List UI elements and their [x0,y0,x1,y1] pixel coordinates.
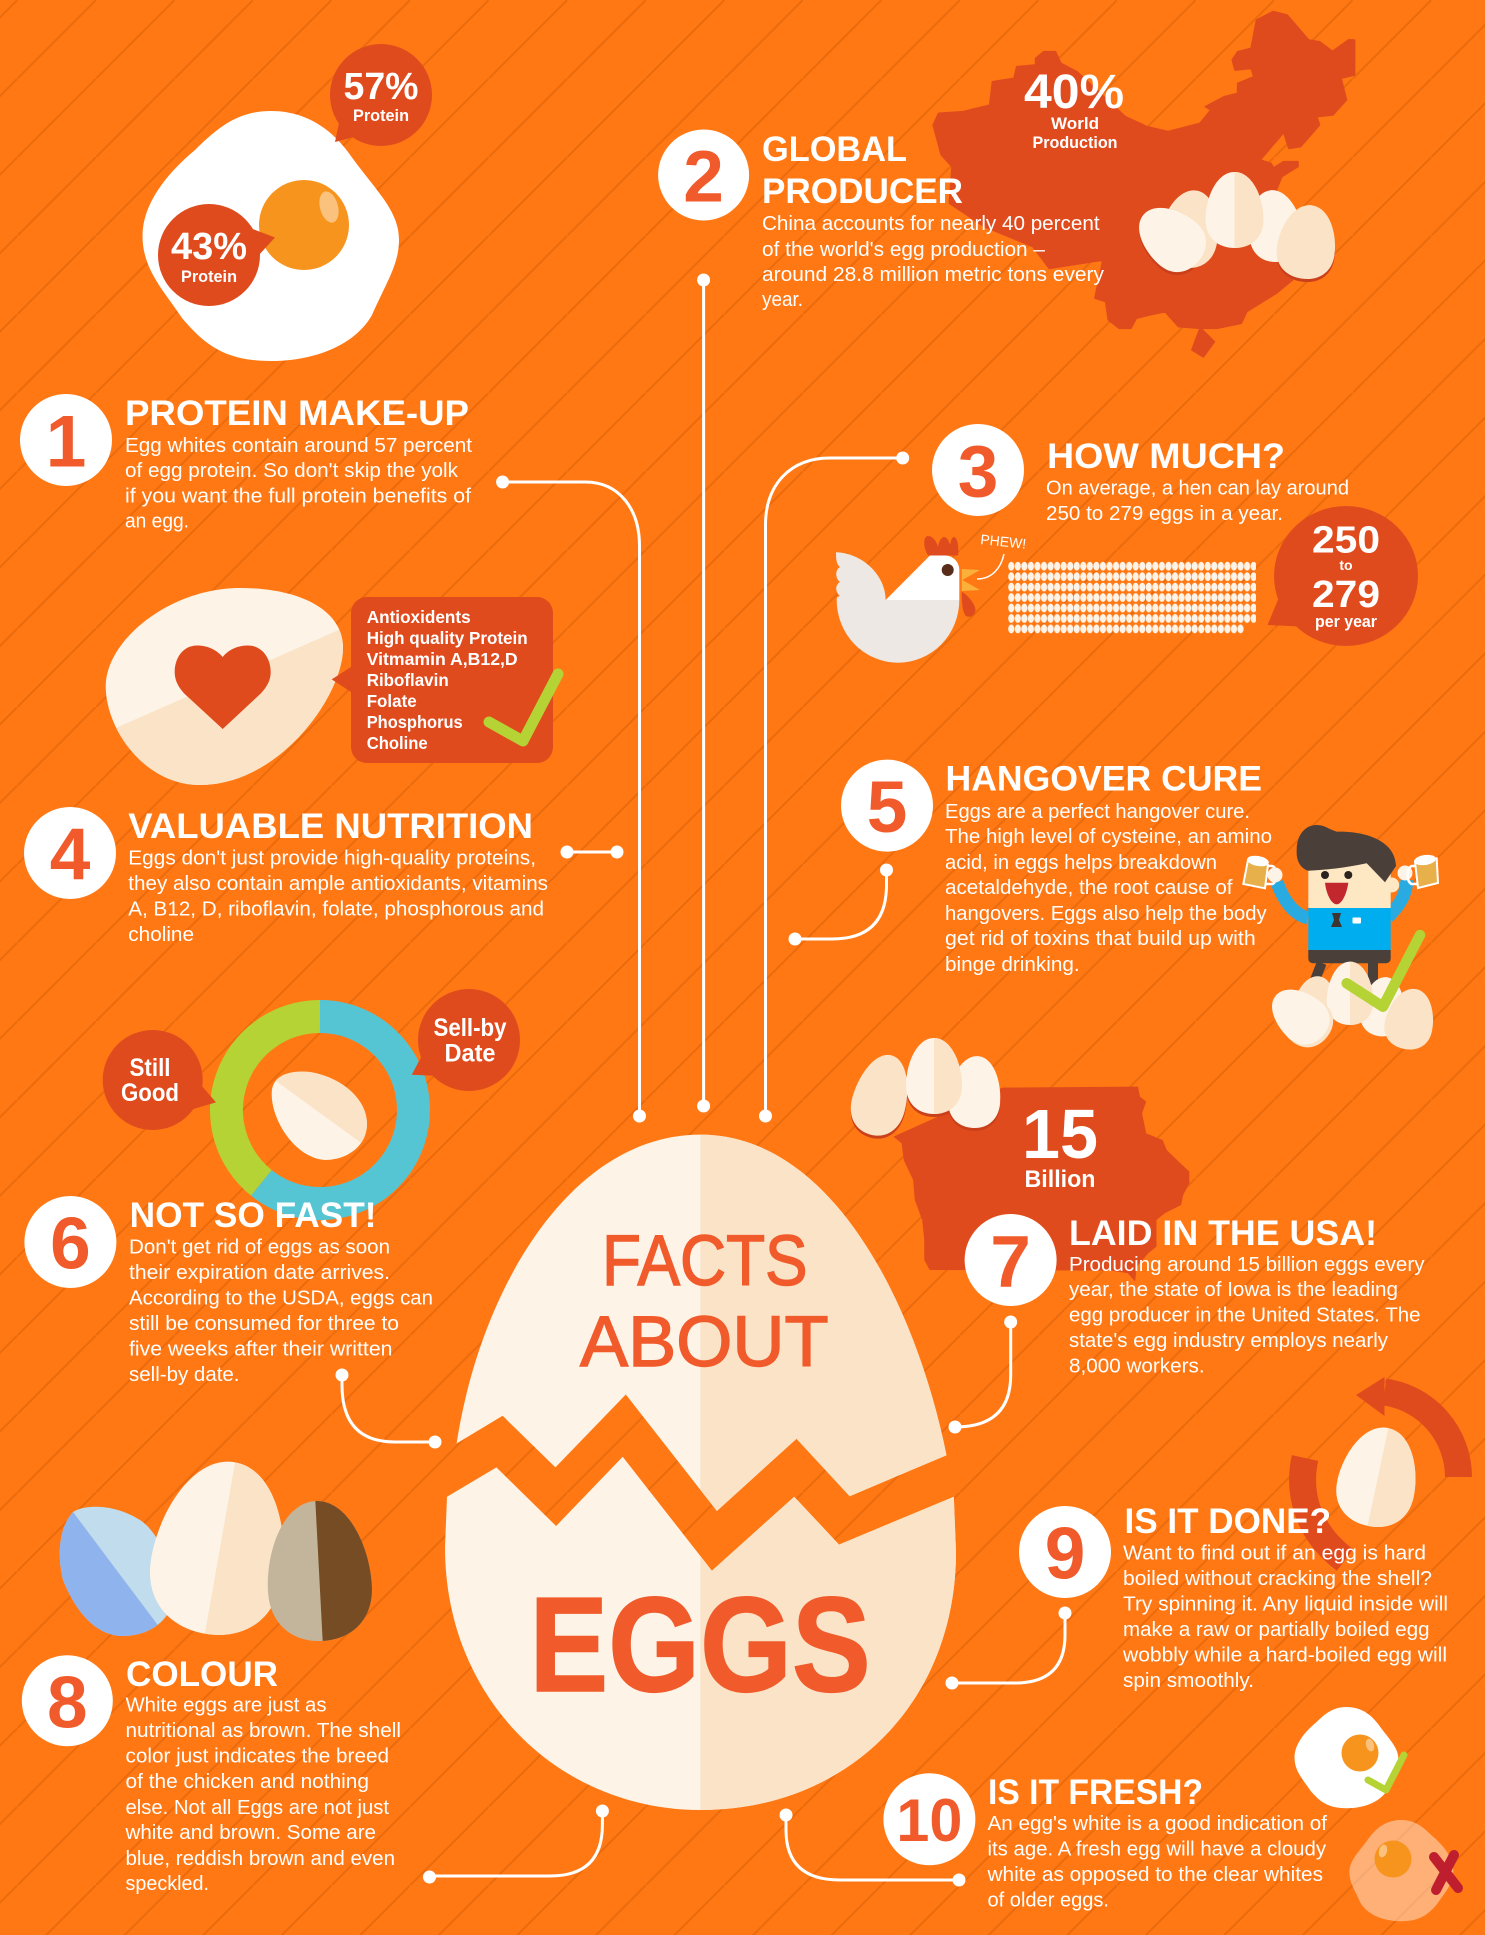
title: facts about: ABOUT [580,1303,829,1382]
section 3: how much: On average, a hen can lay around [1046,477,1349,500]
bubble: sell-by date: Sell-by [434,1014,507,1042]
icon: red cross [1434,1855,1458,1890]
section 2: global producer: China accounts for nearly 40 percent [762,212,1100,235]
section 4: valuable nutrition: 4 [50,815,91,896]
section 7: laid in the USA [965,1214,1425,1378]
section 9: is it done: wobbly while a hard-boiled egg will [1122,1644,1447,1666]
section 2: global producer: PRODUCER [762,172,963,211]
section 4: valuable nutrition: Eggs don't just provide high-quality proteins, [128,847,536,870]
section 8: colour: nutritional as brown. The shell [126,1719,401,1742]
section 1: protein make-up: of egg protein. So don't skip the yolk [125,459,459,482]
title: facts about [580,1222,829,1382]
section 6: not so fast: Don't get rid of eggs as soon [129,1236,390,1258]
section 8: colour: blue, reddish brown and even [126,1847,395,1870]
section 6: not so fast: NOT SO FAST! [130,1196,376,1235]
title egg: cracked shell with heading [445,1135,956,1810]
section 8: colour: White eggs are just as [126,1694,326,1717]
callout: nutrient list: Folate [367,691,417,711]
section 10: is it fresh: its age. A fresh egg will have a cloudy [988,1838,1327,1861]
section 9: is it done: 9 [1045,1514,1085,1595]
callout: nutrient list: Vitmamin A,B12,D [367,649,518,669]
section 10: is it fresh: white as opposed to the clear whites [986,1863,1323,1886]
section 2: global producer [658,130,1105,311]
section 6: not so fast: their expiration date arrives. [129,1261,390,1284]
text: 40% world production: World [1051,114,1099,133]
callout: nutrient list: High quality Protein [367,628,528,648]
section 4: valuable nutrition: they also contain ample antioxidants, vitamins [128,872,548,895]
bubble: still good [103,1030,216,1130]
illustration: fresh fried egg [1295,1707,1404,1808]
section 4: valuable nutrition: A, B12, D, riboflavin, folate, phosphorous and [128,898,544,921]
section 2: global producer: 2 [683,137,724,218]
section 6: not so fast: 6 [50,1204,91,1285]
section 2: global producer: GLOBAL [762,130,907,169]
illustration: coloured eggs [60,1451,375,1645]
section 6: not so fast: still be consumed for three to [129,1312,399,1335]
text: 40% world production [1024,66,1124,152]
connector lines [336,274,1072,1886]
section 5: hangover cure: Eggs are a perfect hangover cure. [945,800,1250,823]
illustration: Iowa map with eggs [844,1038,1189,1282]
section 6: not so fast: sell-by date. [129,1363,240,1386]
icon: check mark [1368,1755,1404,1790]
chart: eggs laid dot grid [1008,561,1256,634]
icon: heart [175,646,271,729]
section 7: laid in the USA: year, the state of Iowa is the leading [1069,1278,1398,1301]
section 5: hangover cure [841,760,1272,976]
section 4: valuable nutrition: VALUABLE NUTRITION [128,807,533,846]
section 8: colour: 8 [47,1662,88,1743]
section 9: is it done: spin smoothly. [1123,1669,1254,1692]
section 6: not so fast: According to the USDA, eggs can [129,1286,433,1310]
bubble: 43% protein [158,204,275,306]
bubble: sell-by date: Date [444,1040,496,1068]
bubble: sell-by date [412,989,520,1091]
illustration: sell-by donut chart [103,989,520,1204]
section 10: is it fresh: An egg's white is a good indication of [988,1812,1327,1835]
section 5: hangover cure: hangovers. Eggs also help the body [945,902,1267,925]
bubble: 57% protein [330,44,432,146]
callout: nutrient list [332,597,558,763]
section 2: global producer: year. [762,288,803,311]
section 1: protein make-up [20,394,472,532]
section 10: is it fresh [883,1773,1327,1912]
section 4: valuable nutrition [24,807,548,946]
text: 40% world production: 40% [1024,66,1124,119]
section 8: colour: else. Not all Eggs are not just [126,1796,389,1819]
section 5: hangover cure: The high level of cysteine, an amino [945,825,1272,848]
section 9: is it done: Want to find out if an egg is hard [1123,1542,1426,1564]
section 7: laid in the USA: LAID IN THE USA! [1069,1214,1377,1253]
section 9: is it done: Try spinning it. Any liquid inside will [1123,1592,1448,1616]
section 10: is it fresh: IS IT FRESH? [988,1773,1203,1812]
bubble: 250 to 279 per year: 250 [1312,520,1380,562]
illustration: fried egg with protein bubbles [142,44,432,361]
icon: egg in donut [272,1072,367,1160]
section 8: colour: color just indicates the breed [126,1745,389,1768]
section 8: colour: speckled. [126,1872,209,1895]
illustration: old fried egg [1349,1820,1458,1921]
icon: left beer mug [1243,854,1277,888]
illustration: hen [836,531,1027,663]
section 5: hangover cure: get rid of toxins that build up with [945,927,1256,950]
icon: check mark [1347,935,1420,1007]
section 8: colour: white and brown. Some are [124,1821,376,1844]
bubble: 250 to 279 per year: to [1339,557,1353,573]
section 6: not so fast: five weeks after their written [129,1338,392,1360]
callout: nutrient list: Phosphorus [367,712,463,732]
text: 40% world production: Production [1032,133,1118,152]
illustration: hangover man with eggs [1243,825,1440,1057]
section 7: laid in the USA: egg producer in the United States. The [1069,1304,1420,1327]
icon: brown egg [263,1498,375,1644]
section 5: hangover cure: 5 [867,767,907,848]
icon: egg pile [1125,172,1341,286]
section 2: global producer: around 28.8 million metric tons every [762,263,1105,286]
bubble: 57% protein: 57% [344,66,418,108]
section 7: laid in the USA: Producing around 15 billion eggs every [1069,1253,1425,1276]
bubble: 43% protein: Protein [181,268,237,286]
section 7: laid in the USA: 8,000 workers. [1069,1355,1205,1378]
section 3: how much [932,424,1349,525]
section 8: colour: COLOUR [126,1655,278,1694]
section 7: laid in the USA: state's egg industry employs nearly [1069,1329,1389,1352]
section 9: is it done [1019,1502,1448,1692]
callout: nutrient list: Riboflavin [367,670,449,690]
section 5: hangover cure: HANGOVER CURE [946,760,1262,798]
section 3: how much: 250 to 279 eggs in a year. [1046,502,1283,525]
section 5: hangover cure: acetaldehyde, the root cause of [945,876,1233,899]
bubble: still good: Still [130,1054,170,1082]
bubble: 250 to 279 per year: per year [1315,612,1377,631]
section 1: protein make-up: 1 [46,402,86,483]
icon: egg trio [844,1038,1004,1145]
section 3: how much: HOW MUCH? [1047,437,1285,476]
section 9: is it done: IS IT DONE? [1124,1502,1331,1541]
section 1: protein make-up: an egg. [125,510,189,532]
section 10: is it fresh: 10 [896,1787,962,1854]
text: 15 billion: Billion [1024,1166,1096,1193]
icon: check mark [489,674,558,741]
section 8: colour [22,1655,401,1895]
illustration: spinning egg with arrows [1303,1377,1458,1560]
section 9: is it done: boiled without cracking the shell? [1123,1567,1432,1590]
section 9: is it done: make a raw or partially boiled egg [1123,1618,1430,1641]
bubble: still good: Good [121,1079,179,1107]
label: phew: PHEW! [980,531,1027,552]
callout: nutrient list: Choline [367,733,428,753]
section 4: valuable nutrition: choline [128,923,194,946]
icon: right beer mug [1407,854,1438,888]
illustration: nutrition egg with heart [106,588,343,785]
section 3: how much: 3 [958,432,998,513]
illustration: map of China with eggs [934,12,1354,357]
section 7: laid in the USA: 7 [990,1222,1031,1303]
section 5: hangover cure: binge drinking. [945,953,1080,976]
section 1: protein make-up: PROTEIN MAKE-UP [125,394,469,433]
text: 15 billion: 15 [1022,1095,1098,1173]
bubble: 57% protein: Protein [353,107,409,125]
section 1: protein make-up: if you want the full protein benefits of [125,484,471,508]
icon: white egg [140,1451,300,1645]
section 10: is it fresh: of older eggs. [988,1889,1109,1912]
section 1: protein make-up: Egg whites contain around 57 percent [125,434,472,457]
section 2: global producer: of the world's egg production – [762,238,1046,261]
callout: nutrient list: Antioxidents [367,607,471,627]
icon: blue egg [60,1507,172,1636]
bubble: 250 to 279 per year [1268,506,1418,646]
title: facts about: FACTS [602,1222,808,1301]
bubble: 43% protein: 43% [171,226,247,268]
title: eggs: EGGS [529,1569,871,1720]
section 5: hangover cure: acid, in eggs helps breakdown [945,851,1217,874]
bubble: 250 to 279 per year: 279 [1312,574,1380,616]
section 8: colour: of the chicken and nothing [126,1770,369,1793]
section 6: not so fast [24,1196,433,1386]
